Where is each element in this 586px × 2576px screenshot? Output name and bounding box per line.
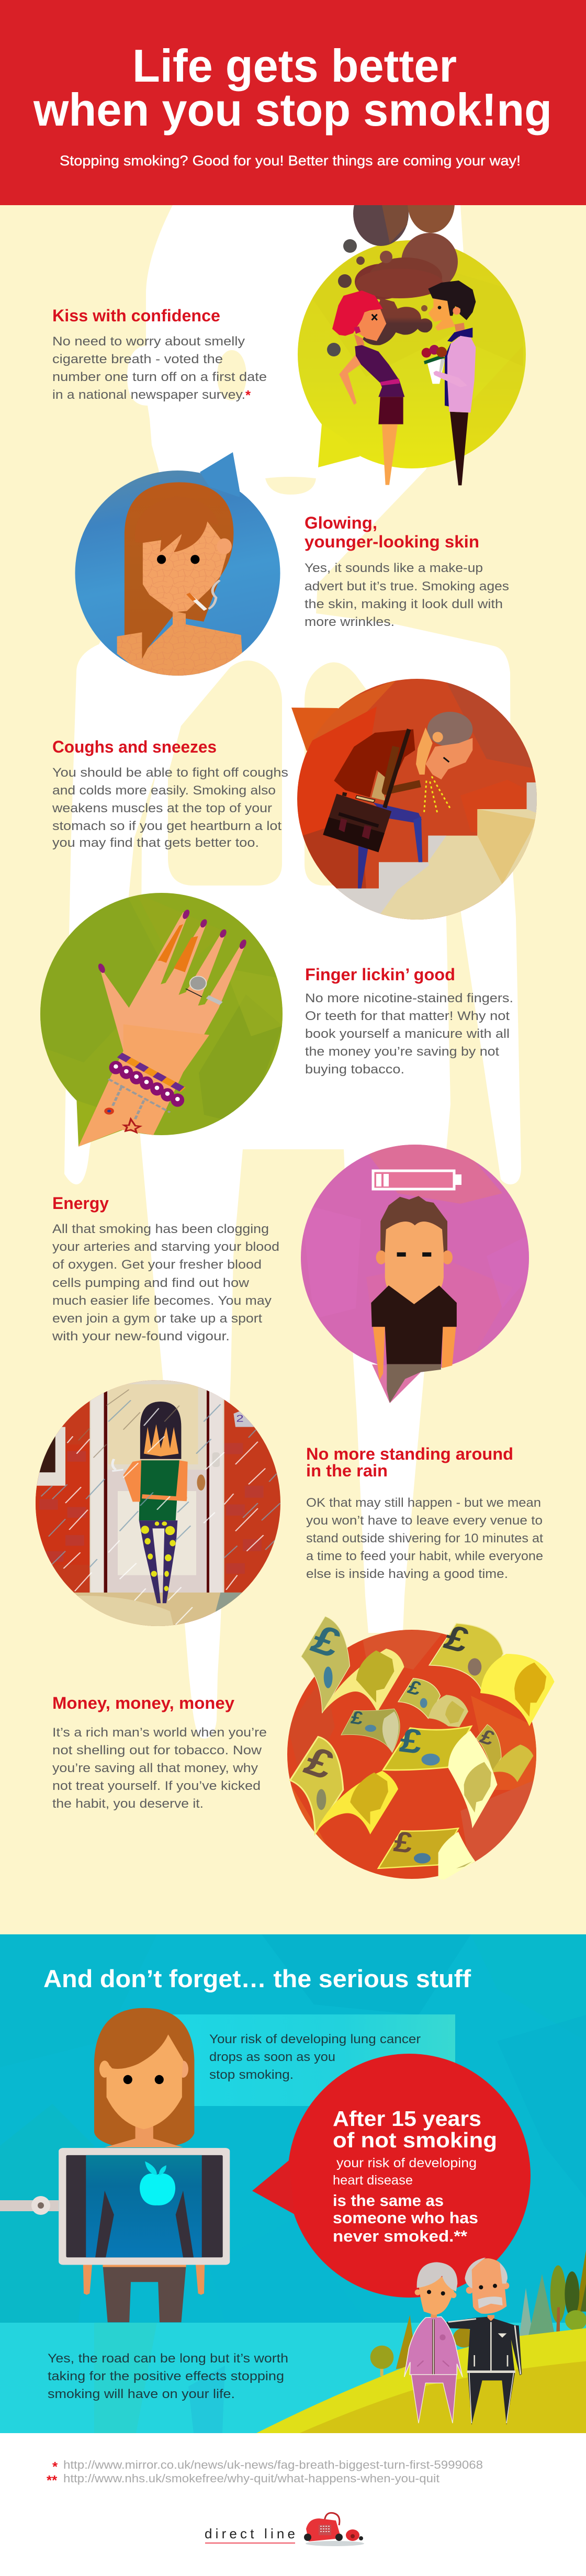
- footnote sources: http://www.nhs.uk/smokefree/why-quit/what-happens-when-you-quit: [63, 2472, 440, 2485]
- title: [33, 40, 552, 136]
- text block: glowing skin: advert but it’s true. Smoking ages: [305, 579, 509, 593]
- text block: glowing skin: more wrinkles.: [305, 615, 395, 629]
- stairs: [337, 782, 537, 920]
- speech bubble: green: [40, 893, 283, 1147]
- text block: finger lickin good: buying tobacco.: [305, 1062, 404, 1077]
- panel: money illustration: [287, 1616, 555, 1880]
- text block: coughs and sneezes: You should be able to fight off coughs: [52, 766, 288, 780]
- smoke clouds: [327, 173, 458, 356]
- text block: energy: even join a gym or take up a sport: [52, 1312, 262, 1326]
- text block: finger lickin good: [305, 965, 513, 1077]
- note: centre: [383, 1721, 498, 1828]
- text block: energy: with your new-found vigour.: [52, 1329, 230, 1343]
- text block: glowing skin: the skin, making it look dull with: [305, 597, 503, 611]
- note: right small: [476, 1724, 533, 1782]
- note: small left of centre: £: [350, 1707, 365, 1729]
- text block: energy: much easier life becomes. You may: [52, 1294, 272, 1308]
- panel: standing in the rain illustration: [36, 1380, 280, 1626]
- panel: coughs illustration: [291, 679, 555, 925]
- text block: energy: of oxygen. Get your fresher blood: [52, 1258, 262, 1272]
- speech bubble: yellow: [298, 240, 526, 471]
- smoking woman with cracked skin: [117, 482, 242, 679]
- note: middle left: [290, 1737, 398, 1834]
- speech bubble: heart disease: your risk of developing: [336, 2156, 477, 2170]
- logo: direct line: direct line: [205, 2526, 295, 2541]
- text block: no more standing in the rain: in the rain: [306, 1461, 388, 1480]
- text block: energy: cells pumping and find out how: [52, 1276, 249, 1290]
- text block: energy: All that smoking has been clogging: [52, 1222, 269, 1236]
- elderly woman: [404, 2262, 463, 2423]
- doorway: 2: [236, 1413, 244, 1424]
- landscape: hills: [256, 2328, 586, 2433]
- text block: no more standing in the rain: [306, 1444, 543, 1581]
- header band: [0, 0, 586, 205]
- panel: kiss with confidence illustration: [298, 205, 526, 486]
- speech bubble: heart disease: heart disease: [333, 2173, 413, 2188]
- text block: coughs and sneezes: Coughs and sneezes: [52, 737, 217, 756]
- cream page background: [0, 0, 586, 1934]
- text block: kiss with confidence: [52, 306, 267, 403]
- text block: energy: [52, 1194, 279, 1343]
- speech bubble: blue: [75, 452, 280, 676]
- x-ray screen: [59, 2148, 230, 2265]
- note: centre: £: [397, 1721, 425, 1761]
- text block: money, money, money: you’re saving all that money, why: [52, 1761, 258, 1775]
- text block: glowing skin: [305, 513, 509, 629]
- text block: kiss with confidence: cigarette breath - voted the: [52, 352, 223, 366]
- rain streaks: [41, 1390, 280, 1625]
- elderly man: [446, 2257, 522, 2425]
- red-orange circle: [287, 1630, 536, 1879]
- title: when you stop smok!ng: [33, 84, 552, 136]
- note: small left of centre: [341, 1707, 400, 1752]
- footnote sources: **: [47, 2472, 58, 2488]
- note: bottom: [378, 1825, 475, 1880]
- text block: coughs and sneezes: you may find that gets better too.: [52, 836, 259, 850]
- text block: kiss with confidence: number one turn off on a first date: [52, 370, 267, 384]
- text block: money, money, money: not shelling out for tobacco. Now: [52, 1743, 262, 1757]
- woman with x-ray screen: [0, 2008, 230, 2322]
- white body silhouette: [64, 205, 521, 1739]
- note: top left: [301, 1616, 404, 1713]
- text block: coughs and sneezes: and colds more easily. Smoking also: [52, 783, 276, 798]
- text: the road can be long: [48, 2351, 288, 2401]
- text block: glowing skin: Yes, it sounds like a make-up: [305, 561, 483, 575]
- note: top right: [429, 1618, 555, 1726]
- text block: energy: your arteries and starving your blood: [52, 1240, 279, 1254]
- speech bubble: orange: [291, 679, 537, 920]
- brick wall background: [31, 1376, 288, 1633]
- footnote sources: http://www.mirror.co.uk/news/uk-news/fag-breath-biggest-turn-first-5999068: [63, 2458, 483, 2471]
- text block: glowing skin: Glowing,: [305, 513, 377, 532]
- note: right small: £: [477, 1725, 498, 1750]
- note: top right: £: [440, 1618, 475, 1661]
- text block: money, money, money: It’s a rich man’s world when you’re: [52, 1726, 267, 1740]
- icon: apple: [140, 2161, 175, 2205]
- text block: no more standing in the rain: a time to feed your habit, while everyone: [306, 1549, 543, 1563]
- battery icon: low: [373, 1171, 461, 1189]
- light panel: [172, 2014, 455, 2106]
- text block: kiss with confidence: in a national newspaper survey.: [52, 388, 245, 402]
- panel: glowing skin illustration: [75, 452, 280, 679]
- icon: red telephone on wheels: [304, 2513, 364, 2546]
- text: lung cancer risk: drops as soon as you: [209, 2050, 335, 2064]
- speech bubble: heart disease: [252, 2054, 531, 2298]
- text block: kiss with confidence: *: [245, 387, 251, 403]
- teal background: [0, 1934, 586, 2433]
- text block: money, money, money: not treat yourself. If you’ve kicked: [52, 1779, 261, 1793]
- panel: serious stuff: [0, 1934, 586, 2433]
- speech bubble: heart disease: of not smoking: [333, 2128, 497, 2152]
- note: bottom: £: [392, 1825, 415, 1860]
- text block: energy: Energy: [52, 1194, 109, 1213]
- woman with red hair: [332, 290, 404, 485]
- elderly couple: [404, 2257, 522, 2425]
- text block: no more standing in the rain: you won’t have to leave every venue to: [306, 1514, 543, 1528]
- text: the road can be long: smoking will have on your life.: [48, 2387, 235, 2401]
- text: lung cancer risk: stop smoking.: [209, 2068, 294, 2082]
- note: middle left: £: [298, 1738, 341, 1788]
- landscape: trees: [370, 2250, 586, 2376]
- sneezing man with bag: [323, 712, 472, 889]
- text block: glowing skin: younger-looking skin: [305, 532, 479, 551]
- logo: direct line: [205, 2513, 364, 2546]
- text block: no more standing in the rain: No more standing around: [306, 1444, 513, 1463]
- text block: no more standing in the rain: stand outside shivering for 10 minutes at: [306, 1531, 543, 1545]
- text block: kiss with confidence: No need to worry about smelly: [52, 334, 245, 349]
- text: the road can be long: taking for the positive effects stopping: [48, 2369, 284, 2383]
- flying pound notes: [290, 1616, 555, 1880]
- heading: And don’t forget… the serious stuff: [43, 1965, 471, 1992]
- woman smoking, back view: [112, 1402, 188, 1603]
- tired man: [371, 1196, 457, 1403]
- text block: money, money, money: the habit, you deserve it.: [52, 1797, 204, 1811]
- text block: coughs and sneezes: stomach so if you get heartburn a lot: [52, 819, 281, 833]
- note: small upper middle: £: [405, 1676, 424, 1700]
- title: Life gets better: [132, 40, 457, 92]
- hand with rings and bracelets: [78, 909, 247, 1147]
- footnote sources: *: [52, 2459, 58, 2474]
- speech bubble: heart disease: After 15 years: [333, 2107, 481, 2131]
- text block: finger lickin good: the money you’re saving by not: [305, 1045, 499, 1059]
- text: the road can be long: Yes, the road can be long but it’s worth: [48, 2351, 288, 2366]
- footnote sources: [47, 2458, 483, 2488]
- text block: no more standing in the rain: else is inside having a good time.: [306, 1567, 508, 1581]
- text: lung cancer risk: Your risk of developing lung cancer: [209, 2032, 421, 2046]
- note: top left: £: [305, 1616, 348, 1666]
- text block: finger lickin good: Or teeth for that matter! Why not: [305, 1009, 510, 1023]
- text block: money, money, money: Money, money, money: [52, 1694, 234, 1712]
- man with bouquet: [422, 281, 476, 485]
- text block: coughs and sneezes: weakens muscles at the top of your: [52, 801, 272, 815]
- speech bubble: heart disease: never smoked.**: [333, 2227, 468, 2245]
- white footer: [0, 2433, 586, 2576]
- note: small upper middle: [398, 1676, 468, 1727]
- subtitle: Stopping smoking? Good for you! Better things are coming your way!: [60, 153, 521, 169]
- text block: finger lickin good: book yourself a manicure with all: [305, 1027, 510, 1041]
- speech bubble: heart disease: someone who has: [333, 2209, 478, 2227]
- text: lung cancer risk: [209, 2032, 421, 2082]
- text block: no more standing in the rain: OK that may still happen - but we mean: [306, 1496, 541, 1510]
- text block: kiss with confidence: Kiss with confidence: [52, 306, 220, 325]
- text block: money, money, money: [52, 1694, 267, 1811]
- speech bubble: pink: [301, 1145, 529, 1403]
- doorway: [37, 1380, 254, 1626]
- speech bubble: heart disease: is the same as: [333, 2191, 444, 2210]
- panel: finger lickin good illustration: [40, 893, 283, 1147]
- x-ray stand: [0, 2196, 59, 2215]
- text block: finger lickin good: Finger lickin’ good: [305, 965, 455, 984]
- text block: finger lickin good: No more nicotine-stained fingers.: [305, 991, 513, 1005]
- panel: energy illustration: [301, 1145, 529, 1403]
- text block: coughs and sneezes: [52, 737, 288, 850]
